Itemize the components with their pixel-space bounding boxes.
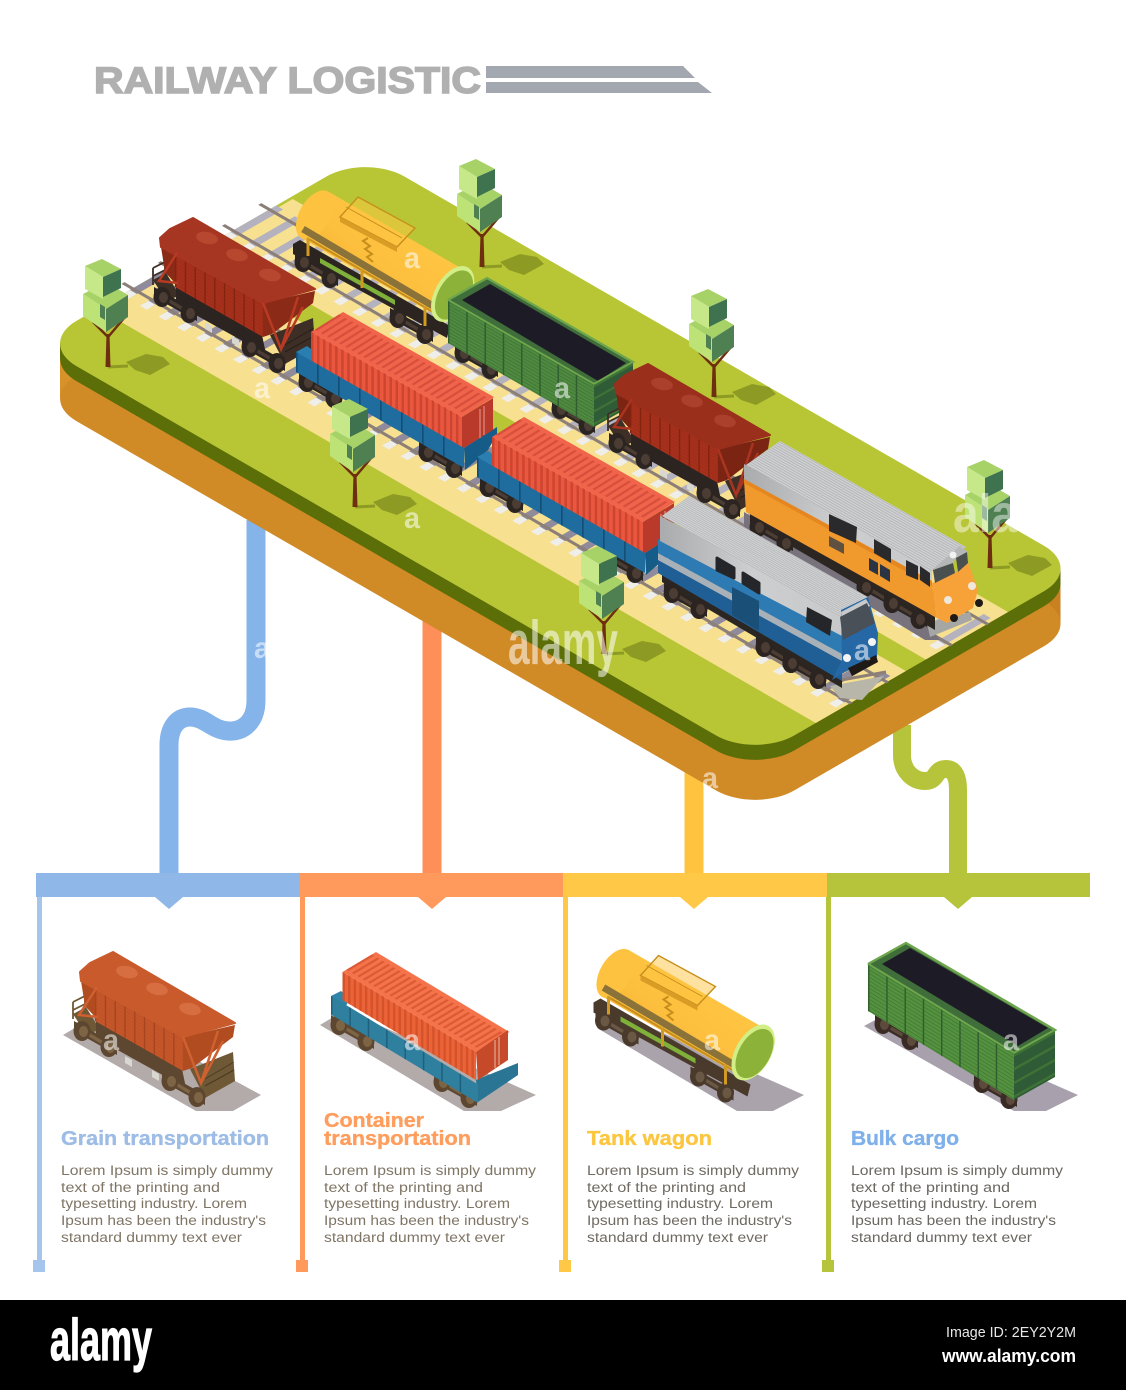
ballast strip: back [210,199,1008,660]
wagon shadow [597,1014,804,1111]
locomotive: orange [744,441,983,640]
track: back [216,204,988,650]
tracks [88,192,1009,724]
container flat wagon [330,952,518,1108]
description [587,1163,799,1245]
description: Ipsum has been the industry's [851,1213,1056,1228]
gondola wagon on track [448,278,633,435]
heading: Container [324,1110,424,1132]
panel: bulk cargo [851,943,1078,1245]
description [851,1163,1063,1245]
wagon watermarks: a [103,1024,119,1057]
watermark marks: a [554,372,570,405]
description: Lorem Ipsum is simply dummy [851,1163,1063,1178]
heading: transportation [324,1128,471,1150]
connector: green [902,725,958,880]
watermark marks: a [254,372,270,405]
description: text of the printing and [61,1180,220,1195]
track: front [116,262,888,708]
description [61,1163,273,1245]
title [94,60,712,101]
description: typesetting industry. Lorem [61,1196,247,1211]
tree: front left [83,259,170,375]
heading [324,1110,471,1150]
platform: dark grass edge [37,169,1083,773]
title: RAILWAY LOGISTIC [94,60,481,101]
watermark marks: ala [953,484,1018,544]
panel: tank wagon [587,940,804,1245]
heading: Grain transportation [61,1128,269,1150]
description: standard dummy text ever [851,1230,1033,1245]
grey side [744,464,932,581]
wagon watermarks [103,1024,1019,1057]
tree: back left [457,159,544,275]
container wagon 2 [477,417,678,583]
bar: tank [559,873,827,1272]
watermark marks: a [404,502,420,535]
footer band [0,1300,1126,1390]
windows [717,558,734,578]
watermark marks [254,242,1018,795]
grey side [660,516,842,636]
watermark marks: a [702,762,718,795]
container wagon 1 [296,312,497,478]
dark blue side [658,559,842,681]
grain hopper wagon [73,952,235,1107]
description: typesetting industry. Lorem [851,1196,1037,1211]
wagon watermarks: a [404,1024,420,1057]
wagon shadow [63,1010,261,1111]
panel: grain transportation [61,952,273,1245]
hopper wagon: front track [153,218,315,373]
description: Lorem Ipsum is simply dummy [61,1163,273,1178]
connector: orange [422,620,442,880]
description [324,1163,536,1245]
panel: container transportation [320,952,536,1245]
tank wagon on track [293,182,474,344]
windows [829,514,857,543]
description: text of the printing and [851,1180,1010,1195]
wagon watermarks: a [1003,1024,1019,1057]
description: Lorem Ipsum is simply dummy [587,1163,799,1178]
bar: container [296,873,563,1272]
platform: grass top [37,154,1083,758]
gondola wagon [868,943,1055,1109]
tree: back right [965,460,1052,576]
description: text of the printing and [587,1180,746,1195]
description: Ipsum has been the industry's [587,1213,792,1228]
wagon shadow [864,1012,1078,1111]
isometric platform [37,154,1083,813]
description: standard dummy text ever [587,1230,769,1245]
description: standard dummy text ever [61,1230,243,1245]
wagon watermarks: a [704,1024,720,1057]
tree: back centre [689,289,776,405]
section bars [33,873,1090,1272]
wagon shadow [320,1010,536,1111]
grey stripe [658,553,842,661]
connector: yellow [684,770,704,880]
heading: Tank wagon [587,1128,712,1150]
watermark marks: a [404,242,420,275]
heading: Bulk cargo [851,1128,959,1150]
image id: Image ID: 2EY2Y2M [946,1324,1076,1341]
watermark marks: a [254,632,270,665]
description: text of the printing and [324,1180,483,1195]
ballast strip: front [100,258,906,723]
tree: front right [579,546,666,662]
roof [746,441,966,571]
nose [832,597,878,680]
blue band [658,539,842,654]
bar: grain [33,873,300,1272]
watermark marks: alamy [508,609,618,678]
website: www.alamy.com [941,1346,1076,1366]
description: typesetting industry. Lorem [587,1196,773,1211]
connector: blue [169,520,256,880]
footer logo: alamy [50,1308,152,1373]
description: standard dummy text ever [324,1230,506,1245]
orange side [744,480,937,618]
bar: bulk [822,873,1090,1272]
description: Lorem Ipsum is simply dummy [324,1163,536,1178]
platform: soil layer [37,209,1083,813]
description: typesetting industry. Lorem [324,1196,510,1211]
tree: front centre [330,399,417,515]
roof [662,496,868,617]
description: Ipsum has been the industry's [324,1213,529,1228]
watermark marks: a [854,634,870,667]
locomotive: blue [658,496,886,700]
tank wagon [594,940,775,1102]
hopper wagon: back track [608,364,770,519]
nose [932,562,978,623]
description: Ipsum has been the industry's [61,1213,266,1228]
